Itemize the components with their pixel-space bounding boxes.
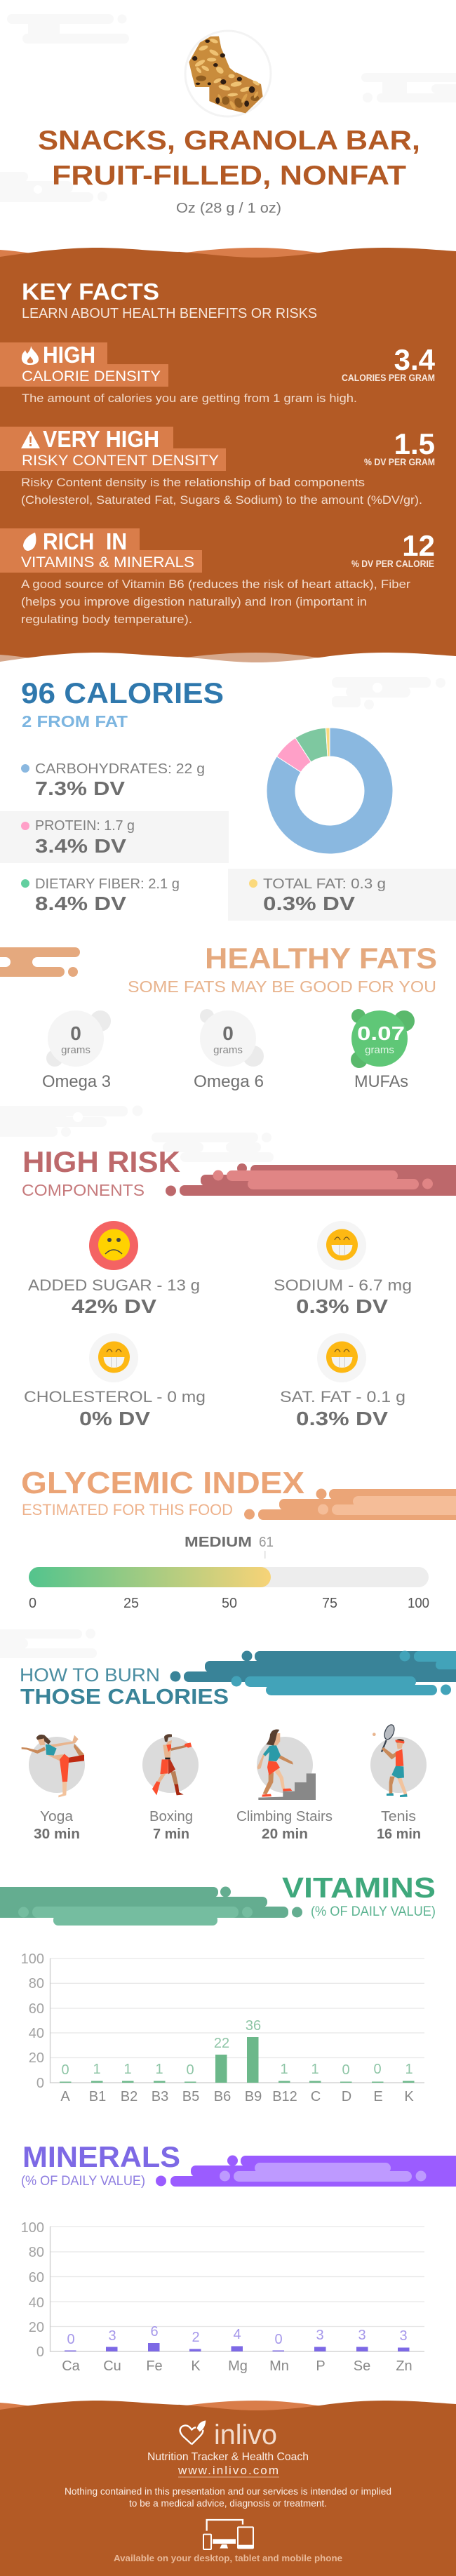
heading: vitamins: VITAMINS xyxy=(282,1871,436,1904)
bar chart: vitamins: K xyxy=(404,2089,414,2104)
bar chart: minerals: 60 xyxy=(29,2270,44,2285)
stat: omega 3: 0 xyxy=(70,1022,81,1044)
bar chart: minerals: Cu xyxy=(103,2358,121,2374)
heading: glycemic index: GLYCEMIC INDEX xyxy=(21,1466,304,1500)
bar chart: vitamins: 0 xyxy=(342,2062,350,2078)
fact: risky content density: % DV PER GRAM xyxy=(364,456,435,467)
bar chart: minerals: 3 xyxy=(399,2328,408,2344)
bar chart: minerals: 0 xyxy=(274,2332,283,2347)
activity: climbing stairs xyxy=(236,1730,333,1842)
bar chart: minerals: 0 xyxy=(36,2344,44,2360)
activity: climbing stairs: 20 min xyxy=(262,1827,308,1842)
activity: tennis: Tenis xyxy=(381,1809,416,1824)
subheading: SOME FATS MAY BE GOOD FOR YOU xyxy=(128,977,436,996)
fact: calorie density: The amount of calories you are getting from 1 gram is high. xyxy=(22,392,357,405)
component: added sugar: ADDED SUGAR - 13 g xyxy=(28,1276,200,1294)
fact: vitamins and minerals: regulating body temperature). xyxy=(21,613,192,626)
subheading: (% OF DAILY VALUE) xyxy=(21,2174,145,2189)
component: cholesterol: 0% DV xyxy=(79,1408,150,1429)
bar chart: vitamins: 1 xyxy=(123,2062,132,2077)
subheading: ESTIMATED FOR THIS FOOD xyxy=(22,1501,233,1519)
fact: vitamins and minerals: % DV PER CALORIE xyxy=(351,558,434,569)
legend: carbohydrates: 7.3% DV xyxy=(35,778,125,799)
heading: high risk: HIGH RISK xyxy=(22,1145,180,1178)
subheading: from fat: 2 FROM FAT xyxy=(22,712,128,730)
activity: boxing: Boxing xyxy=(149,1809,193,1824)
bar chart: vitamins: 0 xyxy=(36,2076,44,2091)
component: sodium: SODIUM - 6.7 mg xyxy=(274,1276,412,1294)
panel: minerals xyxy=(21,2140,456,2374)
bar chart: vitamins: B5 xyxy=(182,2089,199,2104)
fact: calorie density xyxy=(0,342,436,405)
bar chart: vitamins: 40 xyxy=(29,2026,44,2041)
heading: healthy fats: HEALTHY FATS xyxy=(205,942,437,975)
gauge scale: 50 xyxy=(222,1596,237,1611)
gauge scale: 100 xyxy=(408,1596,429,1611)
bar chart: minerals: Ca xyxy=(62,2358,81,2374)
serving size: Oz (28 g / 1 oz) xyxy=(176,201,281,216)
heading: how to burn: HOW TO BURN xyxy=(20,1664,160,1686)
activity: climbing stairs: Climbing Stairs xyxy=(236,1809,333,1824)
bar chart: minerals: P xyxy=(316,2358,326,2374)
panel: vitamins xyxy=(0,1871,436,2104)
bar chart: minerals xyxy=(21,2220,424,2374)
fact: vitamins and minerals: RICH IN xyxy=(43,528,127,554)
food photo: granola bar xyxy=(185,31,271,116)
decorative blob: burn xyxy=(170,1650,456,1695)
bar chart: minerals: 3 xyxy=(316,2328,324,2343)
bar chart: minerals: 40 xyxy=(29,2295,44,2311)
bar chart: vitamins: B1 xyxy=(89,2089,106,2104)
decorative blob: glycemic xyxy=(244,1489,456,1520)
legend: total fat: 0.3% DV xyxy=(263,893,355,914)
title xyxy=(38,126,420,191)
fact: vitamins and minerals: 12 xyxy=(402,529,435,562)
gauge bar xyxy=(29,1567,429,1587)
bar chart: vitamins: B3 xyxy=(152,2089,168,2104)
bar chart: vitamins: 60 xyxy=(29,2001,44,2017)
gauge scale xyxy=(29,1596,429,1611)
decorative blob: vitamins xyxy=(0,1886,302,1926)
panel: how to burn xyxy=(20,1650,456,1842)
bar chart: minerals: 20 xyxy=(29,2320,44,2335)
decorative blob: healthy fats xyxy=(0,947,80,977)
bar chart: vitamins: C xyxy=(311,2089,321,2104)
bar chart: vitamins: 20 xyxy=(29,2050,44,2066)
legend: carbohydrates xyxy=(21,761,205,799)
legend: dietary fiber: 8.4% DV xyxy=(35,893,126,914)
component: sodium: 0.3% DV xyxy=(296,1295,388,1317)
legend: protein: PROTEIN: 1.7 g xyxy=(35,818,135,834)
bar chart: minerals: K xyxy=(191,2358,201,2374)
bar chart: vitamins: 0 xyxy=(61,2062,69,2078)
label: medium 61 xyxy=(185,1535,274,1559)
title: SNACKS, GRANOLA BAR, xyxy=(38,126,420,156)
activity: yoga xyxy=(22,1735,85,1842)
stat: mufas: 0.07 xyxy=(357,1022,405,1044)
bar chart: vitamins: 1 xyxy=(311,2062,319,2077)
bar chart: vitamins: 1 xyxy=(280,2062,288,2077)
bar chart: vitamins: B6 xyxy=(214,2089,231,2104)
fact: risky content density xyxy=(0,426,435,507)
legend: total fat: TOTAL FAT: 0.3 g xyxy=(263,876,386,892)
bar chart: vitamins: 1 xyxy=(93,2062,101,2077)
disclaimer xyxy=(65,2486,391,2509)
fact: risky content density: RISKY CONTENT DENSITY xyxy=(22,453,219,469)
stat: omega 6: Omega 6 xyxy=(194,1072,264,1091)
fact: calorie density: 3.4 xyxy=(394,343,436,376)
component: saturated fat: 0.3% DV xyxy=(296,1408,388,1429)
panel: healthy fats xyxy=(0,942,437,1091)
icon: leaf xyxy=(23,533,36,551)
bar chart: minerals: 3 xyxy=(108,2328,116,2344)
icon: devices xyxy=(203,2520,253,2549)
panel: footer xyxy=(0,2401,456,2576)
label: medium 61: MEDIUM xyxy=(185,1535,252,1550)
fact: vitamins and minerals xyxy=(0,528,435,626)
tagline: Nutrition Tracker & Health Coach xyxy=(147,2451,309,2463)
disclaimer: Nothing contained in this presentation and our services is intended or implied xyxy=(65,2486,391,2497)
component: sodium xyxy=(274,1221,412,1317)
stat: omega 3: grams xyxy=(61,1044,90,1056)
bar chart: minerals: Mg xyxy=(228,2358,248,2374)
bar chart: minerals: 80 xyxy=(29,2245,44,2260)
heading: calories: 96 CALORIES xyxy=(21,676,224,709)
panel: calories xyxy=(0,676,456,921)
title: FRUIT-FILLED, NONFAT xyxy=(52,161,406,191)
stat: omega 3: Omega 3 xyxy=(42,1072,111,1091)
disclaimer: to be a medical advice, diagnosis or treatment. xyxy=(129,2498,327,2509)
gauge scale: 25 xyxy=(123,1596,139,1611)
fact: risky content density: Risky Content density is the relationship of bad components xyxy=(21,476,365,489)
bar chart: minerals: Se xyxy=(354,2358,370,2374)
fact: risky content density: VERY HIGH xyxy=(43,426,159,452)
logo: inlivo: inlivo xyxy=(214,2420,277,2450)
component: saturated fat xyxy=(280,1333,405,1429)
heading: minerals: MINERALS xyxy=(22,2140,180,2173)
bar chart: minerals: Zn xyxy=(396,2358,413,2374)
stat: omega 6: 0 xyxy=(222,1022,234,1044)
heading: key facts: KEY FACTS xyxy=(22,279,159,305)
bar chart: vitamins: 1 xyxy=(155,2062,163,2077)
bar chart: vitamins: 100 xyxy=(21,1951,44,1967)
activity: tennis: 16 min xyxy=(377,1827,421,1842)
activity: tennis xyxy=(370,1723,427,1842)
fact: calorie density: CALORIE DENSITY xyxy=(22,368,161,385)
stat: omega 3 xyxy=(42,1010,111,1091)
bar chart: vitamins: 1 xyxy=(405,2062,413,2077)
stat: mufas xyxy=(351,1009,415,1091)
stat: mufas: grams xyxy=(365,1044,394,1056)
bar chart: minerals: 3 xyxy=(358,2328,366,2343)
logo: inlivo xyxy=(180,2420,277,2450)
fact: vitamins and minerals: VITAMINS & MINERALS xyxy=(21,554,194,570)
fact: vitamins and minerals: A good source of Vitamin B6 (reduces the risk of heart attack), Fiber xyxy=(21,578,410,591)
panel: high risk xyxy=(22,1145,456,1429)
component: cholesterol xyxy=(24,1333,206,1429)
bar chart: vitamins: 80 xyxy=(29,1976,44,1991)
subheading: components: COMPONENTS xyxy=(22,1181,145,1199)
bar chart: vitamins: 22 xyxy=(214,2036,229,2051)
stat: omega 6: grams xyxy=(213,1044,243,1056)
gauge scale: 75 xyxy=(322,1596,337,1611)
activity: yoga: 30 min xyxy=(34,1827,80,1842)
fact: calorie density: HIGH xyxy=(43,342,95,368)
component: cholesterol: CHOLESTEROL - 0 mg xyxy=(24,1388,206,1406)
legend: carbohydrates: CARBOHYDRATES: 22 g xyxy=(35,761,205,777)
label: medium 61: 61 xyxy=(259,1535,274,1550)
stat: omega 6 xyxy=(194,1009,264,1091)
donut chart xyxy=(267,728,393,854)
legend: dietary fiber xyxy=(21,876,180,914)
legend: dietary fiber: DIETARY FIBER: 2.1 g xyxy=(35,876,180,892)
bar chart: minerals: 2 xyxy=(192,2330,200,2345)
bar chart: minerals: Mn xyxy=(269,2358,289,2374)
activity: yoga: Yoga xyxy=(40,1809,74,1824)
panel: glycemic index xyxy=(21,1466,456,1611)
activity: boxing: 7 min xyxy=(153,1827,189,1842)
component: added sugar: 42% DV xyxy=(72,1295,156,1317)
legend: total fat xyxy=(228,869,456,921)
decorative blob: minerals xyxy=(156,2156,456,2187)
fact: calorie density: CALORIES PER GRAM xyxy=(342,372,435,383)
subheading: LEARN ABOUT HEALTH BENEFITS OR RISKS xyxy=(22,306,317,321)
availability note: Available on your desktop, tablet and mobile phone xyxy=(114,2553,342,2563)
bar chart: minerals: 4 xyxy=(233,2327,241,2342)
bar chart: vitamins: E xyxy=(373,2089,383,2104)
legend: protein xyxy=(0,811,229,863)
panel: key facts xyxy=(0,248,456,675)
component: added sugar xyxy=(28,1221,200,1317)
activity: boxing xyxy=(142,1734,199,1842)
icon: flame xyxy=(22,346,39,365)
icon: warning triangle xyxy=(21,431,40,448)
bar chart: vitamins: B2 xyxy=(121,2089,138,2104)
bar chart: vitamins xyxy=(21,1951,424,2104)
stat: mufas: MUFAs xyxy=(354,1072,408,1091)
bar chart: minerals: 100 xyxy=(21,2220,44,2236)
legend: protein: 3.4% DV xyxy=(35,835,126,857)
subheading: (% OF DAILY VALUE) xyxy=(311,1904,436,1919)
bar chart: minerals: 6 xyxy=(150,2324,159,2340)
decorative blob: high risk xyxy=(166,1163,456,1196)
website link: www.inlivo.com xyxy=(177,2464,279,2477)
bar chart: vitamins: B9 xyxy=(245,2089,262,2104)
bar chart: vitamins: 36 xyxy=(246,2018,261,2034)
fact: risky content density: 1.5 xyxy=(394,427,435,460)
component: saturated fat: SAT. FAT - 0.1 g xyxy=(280,1388,405,1406)
bar chart: vitamins: D xyxy=(342,2089,351,2104)
bar chart: minerals: 0 xyxy=(67,2332,75,2347)
bar chart: vitamins: 0 xyxy=(186,2062,194,2078)
fact: vitamins and minerals: (helps you improve digestion naturally) and Iron (important in xyxy=(21,595,367,608)
bar chart: vitamins: B12 xyxy=(272,2089,297,2104)
bar chart: vitamins: A xyxy=(60,2089,70,2104)
bar chart: minerals: Fe xyxy=(146,2358,163,2374)
fact: risky content density: (Cholesterol, Saturated Fat, Sugars & Sodium) to the amount (%DV/gr). xyxy=(21,493,422,507)
bar chart: vitamins: 0 xyxy=(373,2062,382,2077)
gauge scale: 0 xyxy=(29,1596,36,1611)
heading: those calories: THOSE CALORIES xyxy=(20,1684,229,1709)
